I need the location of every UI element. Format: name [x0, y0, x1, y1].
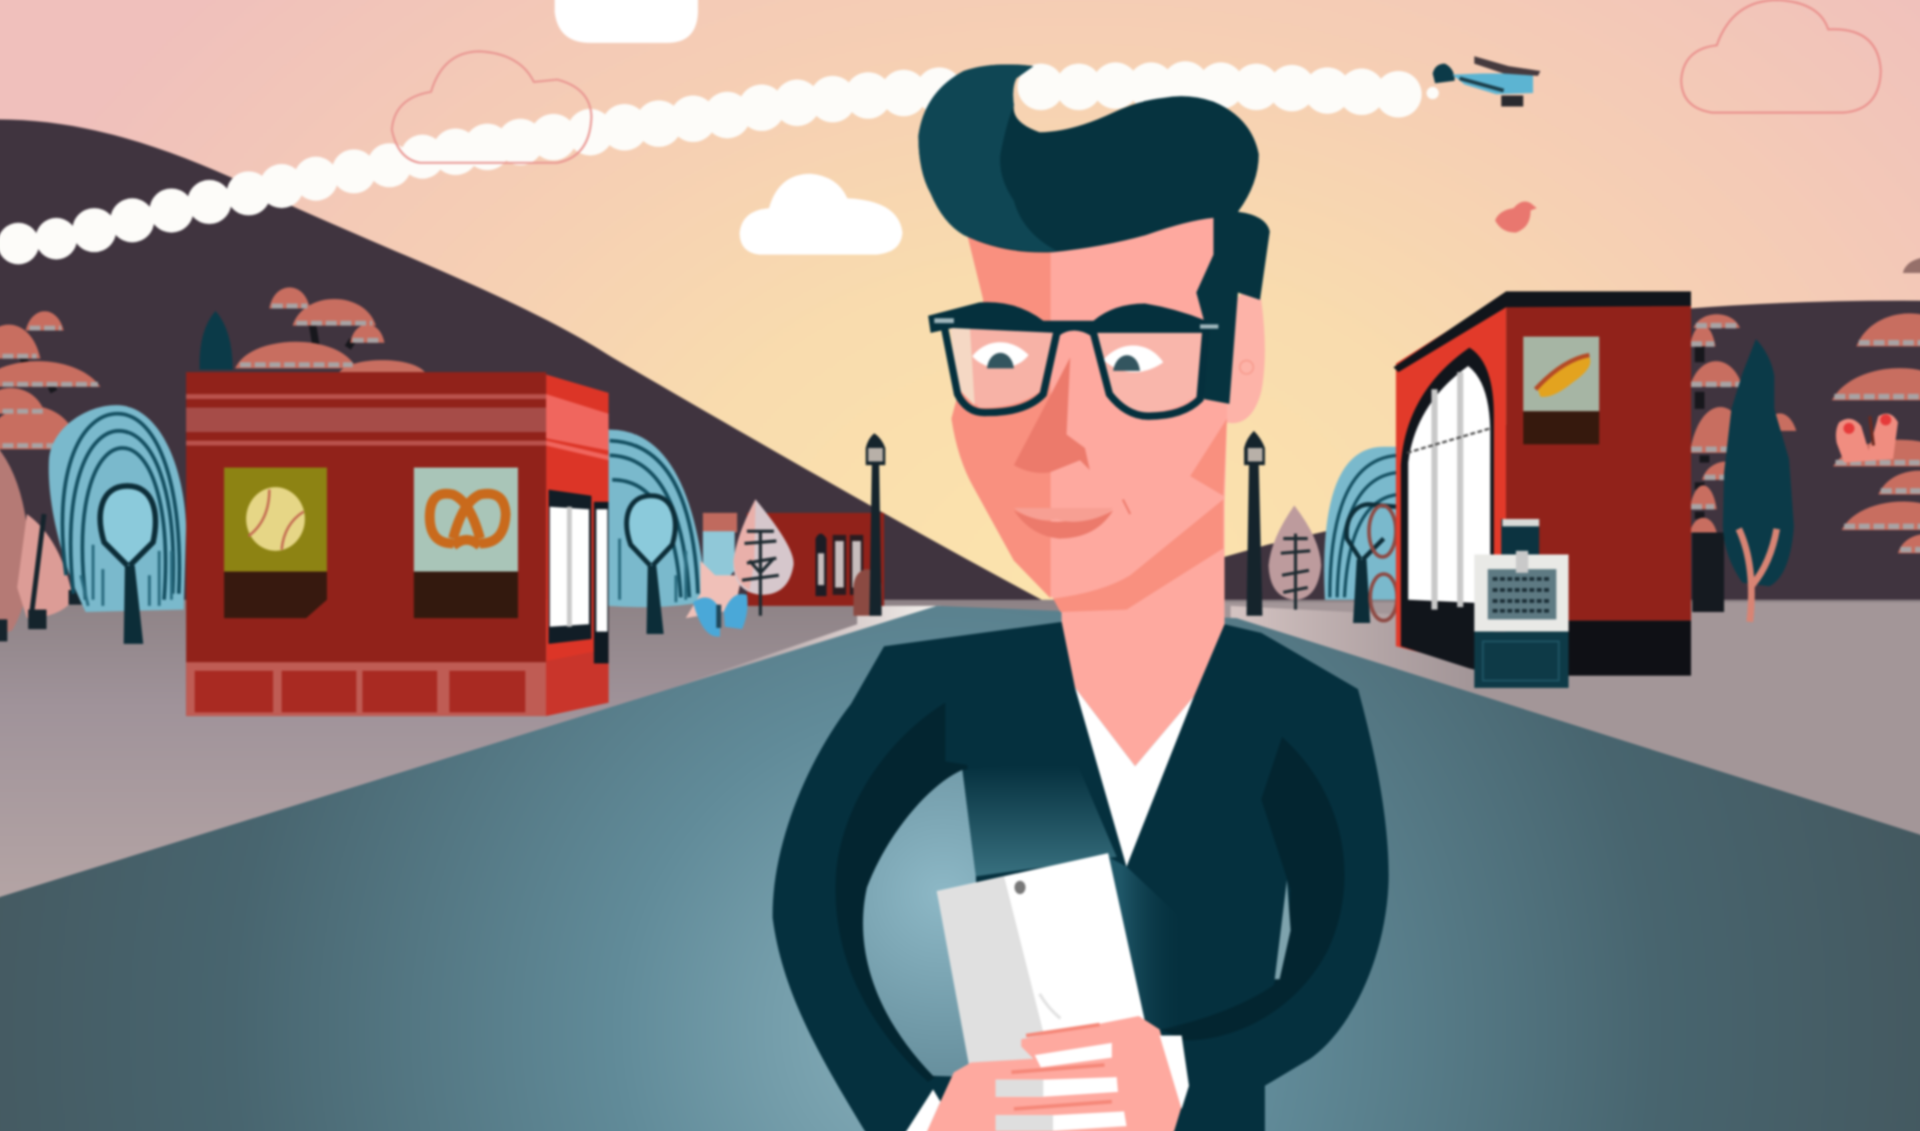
- branches: [1700, 338, 1704, 519]
- canopy domes: [0, 287, 425, 449]
- cloud: outline right: [1681, 0, 1881, 113]
- skywriting trail: [0, 61, 1439, 264]
- face shadow half: [951, 220, 1051, 599]
- grey brown tip: [1903, 257, 1920, 273]
- fire hydrant: [853, 569, 882, 616]
- pavement right side: [1224, 602, 1920, 857]
- left shirt cuff: [894, 1089, 940, 1131]
- building: left kiosk: [186, 372, 609, 716]
- jacket: [773, 622, 1389, 1131]
- ear: [1224, 290, 1265, 423]
- canopy domes: [1690, 313, 1920, 553]
- jaw shadow: [1053, 499, 1223, 612]
- glasses: [928, 302, 1218, 416]
- butterfly: [693, 594, 748, 637]
- kiosk side: [1396, 294, 1506, 674]
- willow tree: left: [49, 405, 186, 644]
- kiosk base panels: [186, 662, 546, 716]
- mushroom trees: left group: [0, 287, 425, 449]
- right eye: [1103, 345, 1163, 372]
- mouth: [1014, 499, 1130, 539]
- building: right kiosk: [1393, 291, 1691, 676]
- kiosk cornice bands: [186, 394, 546, 399]
- arched window: [1401, 348, 1494, 674]
- lenses: [950, 324, 1053, 408]
- willow tree: right: [1324, 447, 1398, 623]
- hair: [918, 64, 1270, 404]
- lamp post: left: [866, 433, 885, 616]
- cloud: top white: [555, 0, 698, 43]
- hot dog poster: [1523, 337, 1599, 444]
- squirrel: [1836, 414, 1898, 463]
- canopy undersides: [0, 306, 382, 446]
- bird: [1495, 202, 1537, 233]
- hill: left: [0, 119, 1053, 606]
- cloud: outline left: [392, 51, 591, 163]
- sliver through right arm: [1275, 880, 1291, 979]
- teardrop tree: left: [733, 499, 794, 616]
- road: [0, 606, 1920, 1131]
- right shirt cuff: [1160, 1036, 1189, 1109]
- canopy undersides: [1691, 326, 1920, 550]
- jacket phone glow right: [1108, 857, 1194, 1029]
- lit pavement by left kerb: [661, 606, 943, 692]
- left eye: [972, 342, 1029, 368]
- shirt collar: [1075, 688, 1194, 867]
- small building: background: [686, 513, 884, 618]
- jacket inner shadow left: [835, 703, 967, 1082]
- lamp post: far left: [0, 514, 83, 641]
- cheek shadow: [1190, 419, 1227, 496]
- jacket inner shadow right: [1161, 737, 1345, 1040]
- man: [773, 64, 1389, 1131]
- nose: [1014, 357, 1090, 473]
- kiosk black cornice: [1393, 291, 1691, 372]
- willow tree: centre left: [609, 430, 704, 634]
- lit pavement by right kerb: [1231, 606, 1469, 692]
- kiosk side: [546, 375, 609, 716]
- cypress tree: right: [1723, 339, 1794, 622]
- branches: [22, 323, 353, 428]
- phone: [937, 853, 1157, 1096]
- mushroom trees: right group: [1690, 257, 1920, 612]
- kiosk black base: [1506, 621, 1691, 676]
- pink trees: far left: [0, 428, 73, 643]
- hand: [912, 1016, 1182, 1131]
- newspaper box: [1474, 519, 1569, 688]
- lamp post: right: [1244, 431, 1265, 616]
- kiosk front: [1506, 306, 1691, 621]
- baseball poster: [224, 468, 327, 618]
- biplane: [1433, 56, 1540, 106]
- bicycle wheels: [1369, 506, 1397, 621]
- kiosk front: [186, 372, 546, 716]
- hill: right: [1224, 301, 1920, 618]
- kiosk side window: [549, 490, 591, 644]
- background seen through arm: [863, 770, 980, 1077]
- cypress: left small: [200, 311, 233, 370]
- ground: pavement: [0, 600, 1920, 930]
- cloud: centre white: [740, 174, 902, 255]
- neck: [1060, 483, 1224, 766]
- face: [951, 218, 1227, 599]
- teardrop tree: right: [1269, 506, 1321, 610]
- pretzel poster: [414, 468, 518, 618]
- frames: [944, 326, 1206, 416]
- jacket phone glow: [962, 759, 1117, 876]
